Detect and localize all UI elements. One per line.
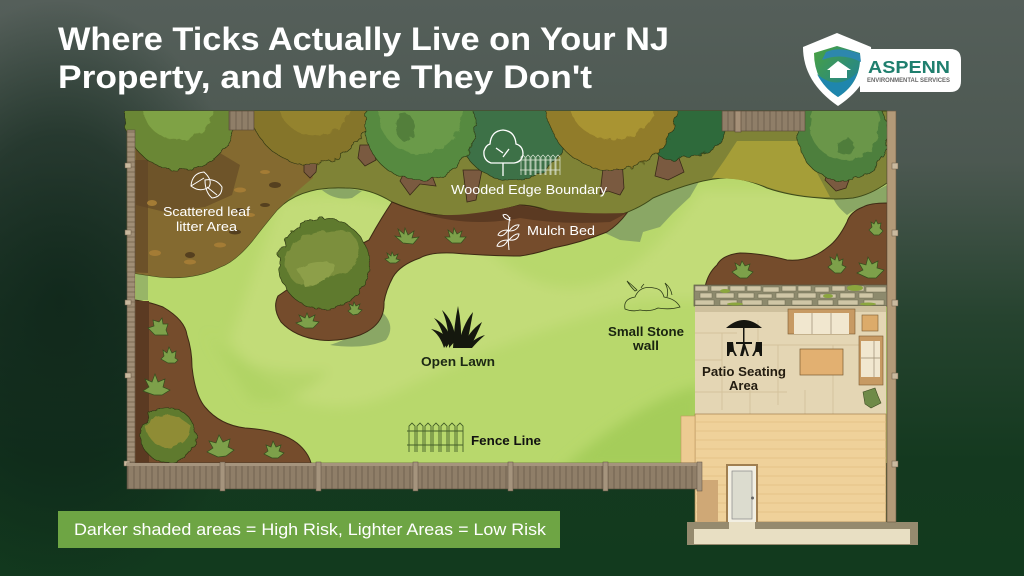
label: wooded edge boundary <box>451 130 608 197</box>
mulch bed: right <box>705 203 887 287</box>
lawn tree shadows <box>136 180 887 347</box>
patio sofa <box>788 309 855 334</box>
scattered leaf litter area <box>127 111 313 278</box>
label: patio seating area: Area <box>729 378 759 393</box>
plants in mulch beds <box>143 220 884 458</box>
tree trunks <box>304 145 852 202</box>
label: fence line <box>407 423 541 452</box>
shrub lower left <box>141 408 195 462</box>
title: Where Ticks Actually Live on Your NJ <box>58 21 669 57</box>
door <box>726 464 758 526</box>
tree: dark green right <box>657 111 726 162</box>
patio armchair sofa <box>859 336 883 385</box>
tree: green <box>364 111 477 182</box>
house roof / deck <box>681 414 886 522</box>
title <box>58 21 669 95</box>
fence: right side <box>887 111 898 522</box>
tree: green right <box>796 111 887 182</box>
fence: bottom <box>127 462 702 491</box>
patio <box>695 306 886 414</box>
label: patio seating area <box>702 364 786 393</box>
tree: dark green centre <box>466 111 564 181</box>
fence segments: top <box>229 111 805 132</box>
label: wooded edge boundary: Wooded Edge Boundary <box>451 182 608 197</box>
icon: shield with house <box>814 46 861 97</box>
mulch shade strip <box>420 205 627 223</box>
label: mulch bed <box>497 215 595 250</box>
open lawn <box>135 178 887 463</box>
legend bar <box>58 511 560 548</box>
fence: left side <box>124 130 135 466</box>
logo: Aspenn Environmental Services: ENVIRONMENTAL SERVICES <box>867 78 950 84</box>
trees along wooded edge <box>124 111 887 202</box>
label: small stone wall <box>608 281 684 353</box>
patio side table <box>862 315 878 331</box>
wooded edge band <box>127 111 887 278</box>
mulch bed: centre <box>276 202 627 340</box>
title: Property, and Where They Don't <box>58 59 592 95</box>
label: fence line: Fence Line <box>471 433 541 448</box>
label: scattered leaf litter area: litter Area <box>176 220 237 234</box>
tree: olive right <box>545 111 678 171</box>
potted plant <box>863 388 881 408</box>
icon: picket fence <box>520 155 560 175</box>
yellow patch in wooded band <box>712 141 830 197</box>
mulch bed: lower left <box>135 300 311 463</box>
label: scattered leaf litter area: Scattered leaf <box>163 205 251 219</box>
label: scattered leaf litter area <box>163 172 251 234</box>
icon: sprig <box>497 215 519 250</box>
label: patio seating area: Patio Seating <box>702 364 786 379</box>
house foundation <box>687 522 918 545</box>
tree: olive left <box>254 111 366 166</box>
legend bar: Darker shaded areas = High Risk, Lighter Areas = Low Risk <box>74 520 547 539</box>
label: open lawn: Open Lawn <box>421 354 495 369</box>
stone wall <box>694 285 887 306</box>
logo: Aspenn Environmental Services: ASPENN <box>868 57 950 77</box>
icon: picket fence <box>407 423 463 452</box>
patio coffee table <box>800 349 843 375</box>
icon: patio umbrella and table <box>726 320 762 356</box>
mulch shade: left edge <box>136 301 149 463</box>
label: open lawn <box>421 306 495 369</box>
icon: grass tuft <box>431 306 485 348</box>
label: small stone wall: wall <box>632 338 659 353</box>
shrub in mulch bed <box>279 219 369 309</box>
icon: rocks and grass <box>625 281 680 311</box>
icon: tree <box>484 130 523 176</box>
icon: leaves <box>191 172 222 198</box>
logo: Aspenn Environmental Services <box>803 33 961 106</box>
tree: upper left <box>124 111 234 172</box>
label: mulch bed: Mulch Bed <box>527 223 595 238</box>
panel: property map <box>124 110 918 545</box>
label: small stone wall: Small Stone <box>608 324 684 339</box>
